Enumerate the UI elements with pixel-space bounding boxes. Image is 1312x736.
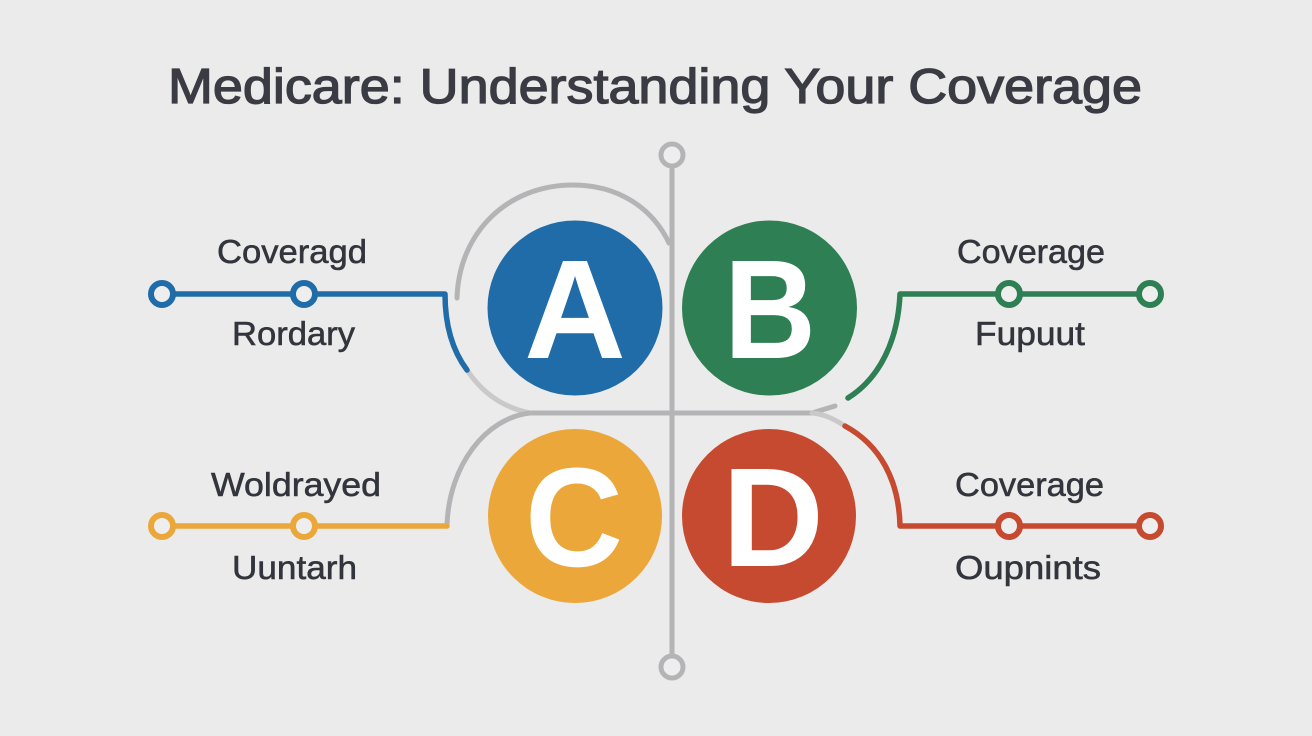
panel: part A: [151, 220, 662, 396]
B lower label: Fupuut: [975, 315, 1085, 352]
B letter: B: [724, 230, 816, 388]
C letter: C: [525, 438, 623, 596]
panel: part D: [682, 426, 1161, 603]
A node start: [151, 283, 173, 305]
central gray connector structure: [447, 144, 845, 678]
C lower label: Uuntarh: [232, 549, 357, 586]
D letter: D: [722, 438, 824, 596]
D upper label: Coverage: [955, 466, 1104, 503]
panel: part C: [151, 429, 662, 603]
A letter: A: [524, 230, 626, 388]
title: Medicare: Understanding Your Coverage: [168, 60, 1142, 114]
B circle: [682, 220, 857, 396]
C upper label: Woldrayed: [211, 466, 381, 503]
D circle: [682, 429, 856, 603]
B upper label: Coverage: [957, 233, 1105, 270]
C node start: [151, 515, 173, 537]
A node middle: [293, 283, 315, 305]
B node end: [1139, 283, 1161, 305]
A upper label: Coveragd: [217, 233, 367, 270]
panel: part B: [682, 220, 1161, 398]
D node middle: [998, 515, 1020, 537]
B node middle: [998, 283, 1020, 305]
C circle: [488, 429, 662, 603]
D lower label: Oupnints: [955, 549, 1101, 586]
A connector line: [173, 294, 467, 370]
C node middle: [293, 515, 315, 537]
A circle: [488, 220, 662, 396]
D node end: [1139, 515, 1161, 537]
C connector line: [173, 523, 447, 529]
D connector line: [845, 426, 1139, 526]
B connector line: [848, 294, 1139, 398]
A lower label: Rordary: [232, 315, 356, 352]
